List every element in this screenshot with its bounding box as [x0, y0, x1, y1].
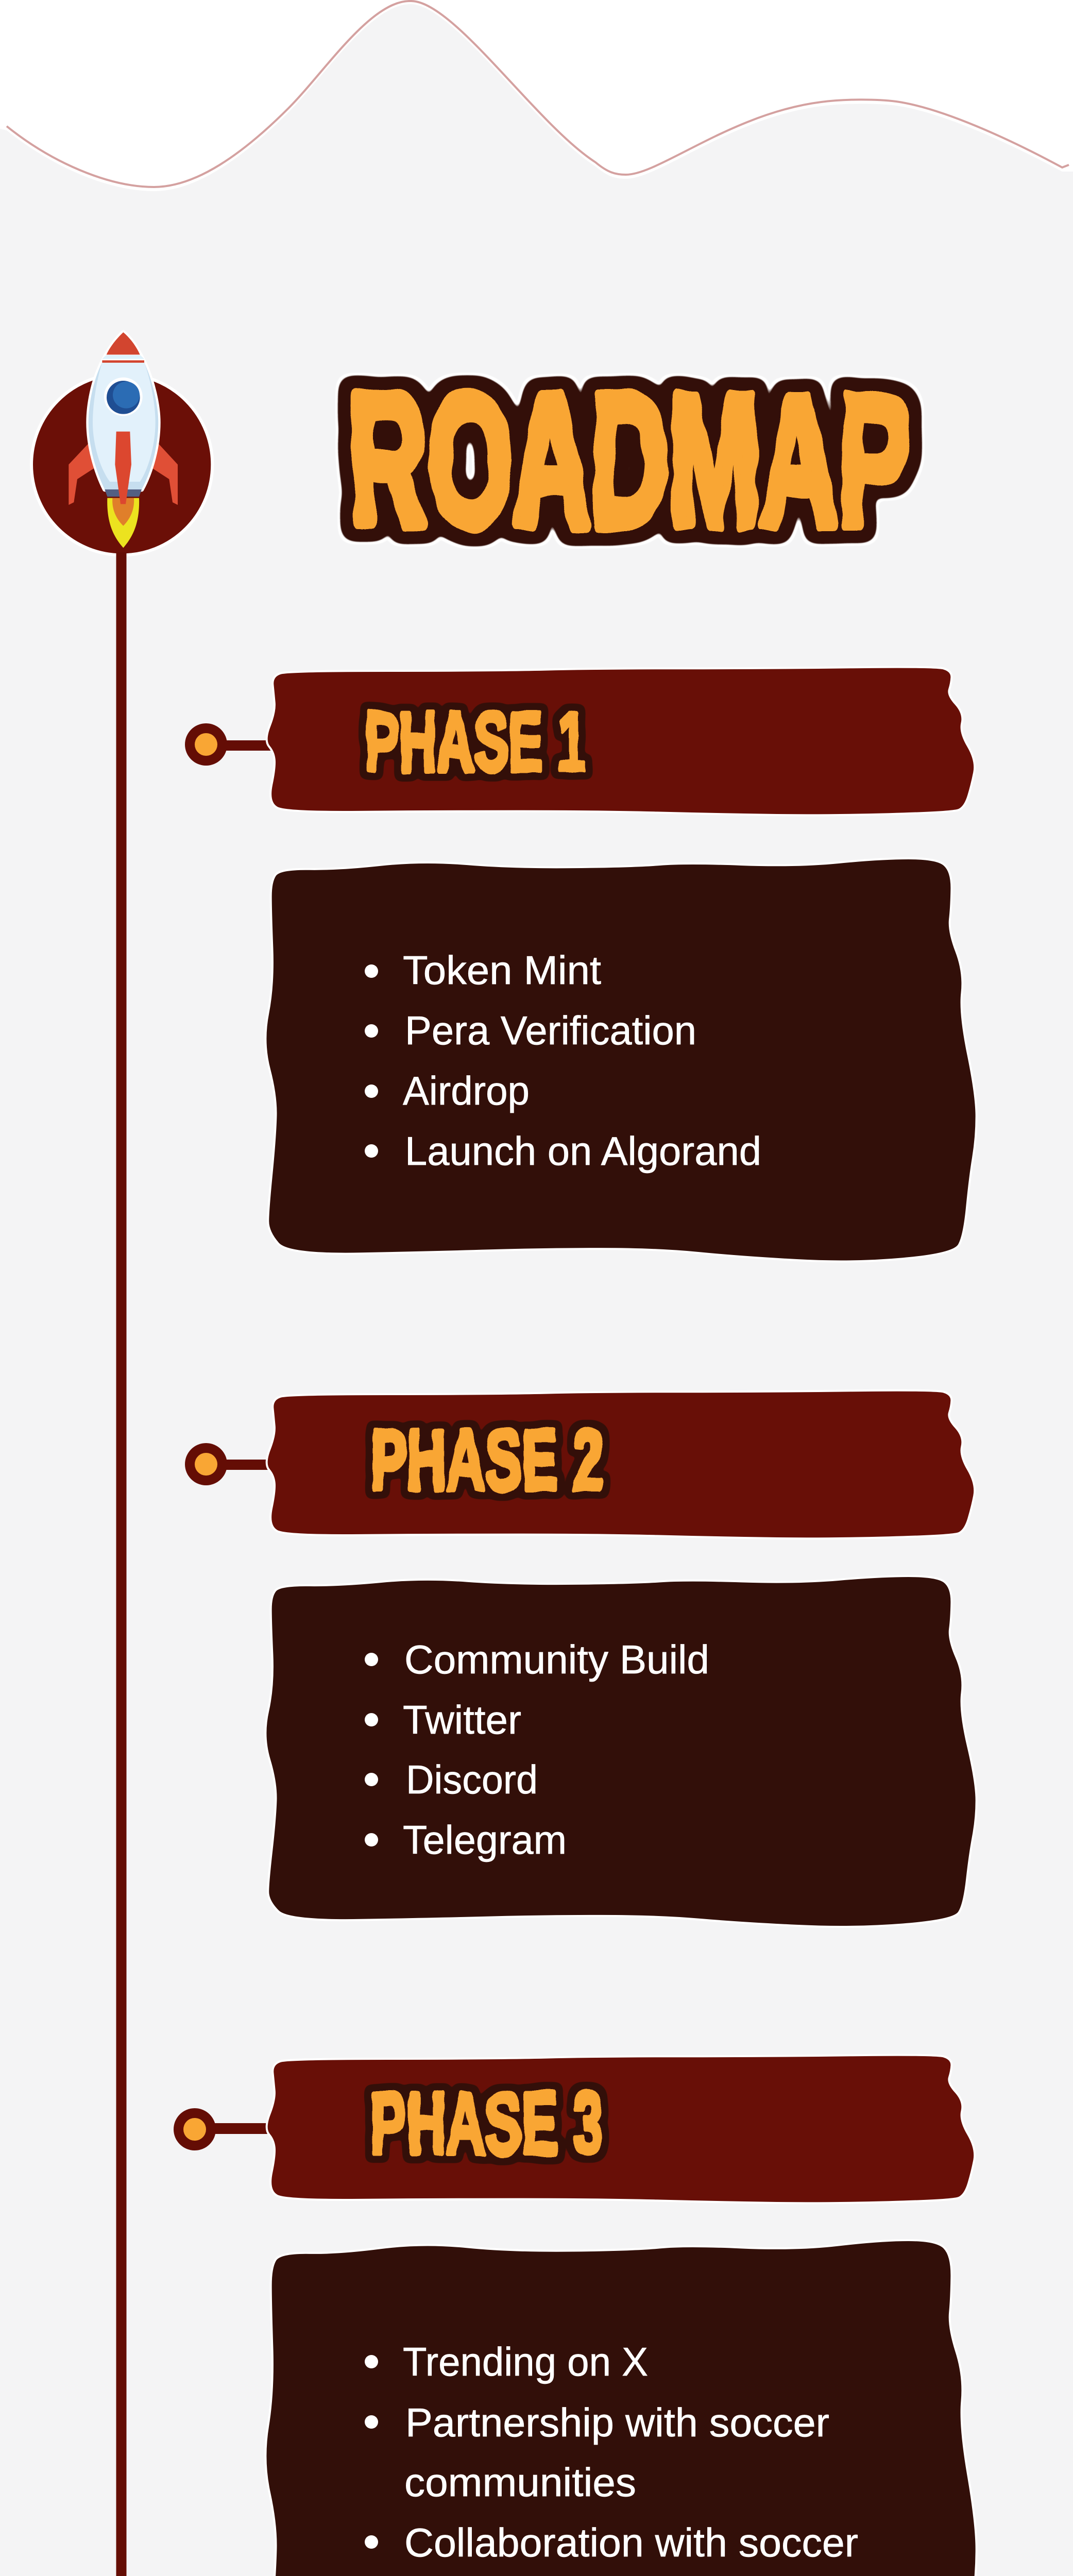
phase 3 list	[365, 2339, 858, 2576]
panel: phase 2 header	[185, 1392, 974, 1537]
phase 1 banner	[268, 668, 974, 814]
phase 3 heading: PHASE 3	[370, 2075, 603, 2173]
phase 3 banner	[268, 2056, 974, 2202]
phase 1 list: Airdrop	[403, 1068, 530, 1113]
panel: phase 3 header	[174, 2056, 974, 2202]
icon: small rocket on circle	[31, 332, 212, 555]
phase 2 connector	[185, 1443, 273, 1485]
panel: phase 1 header	[185, 668, 974, 814]
top torn edge	[0, 0, 1073, 191]
phase 1 list: Pera Verification	[405, 1008, 696, 1053]
phase 1 list	[365, 947, 761, 1174]
phase 3 list: communities	[404, 2460, 636, 2505]
phase 1 list: Token Mint	[403, 947, 601, 993]
panel: phase 2 body	[266, 1577, 976, 1926]
phase 2 list	[365, 1637, 709, 1862]
timeline line	[122, 552, 332, 2576]
phase 1 connector	[185, 723, 273, 766]
phase 3 list: Collaboration with soccer	[404, 2520, 858, 2565]
phase 2 list: Twitter	[403, 1697, 521, 1742]
phase 2 list: Telegram	[403, 1817, 567, 1862]
phase 2 list: Community Build	[404, 1637, 709, 1682]
phase 1 list: Launch on Algorand	[405, 1128, 761, 1174]
phase 2 list: Discord	[406, 1757, 538, 1802]
phase 3 connector	[174, 2108, 273, 2150]
phase 2 banner	[268, 1392, 974, 1537]
panel: phase 3 body	[266, 2241, 976, 2576]
phase 2 heading: PHASE 2	[370, 1412, 603, 1508]
phase 3 list: Partnership with soccer	[405, 2400, 829, 2445]
phase 3 list: Trending on X	[403, 2339, 648, 2384]
panel: phase 1 body	[266, 859, 976, 1260]
phase 1 heading: PHASE 1	[365, 694, 586, 789]
